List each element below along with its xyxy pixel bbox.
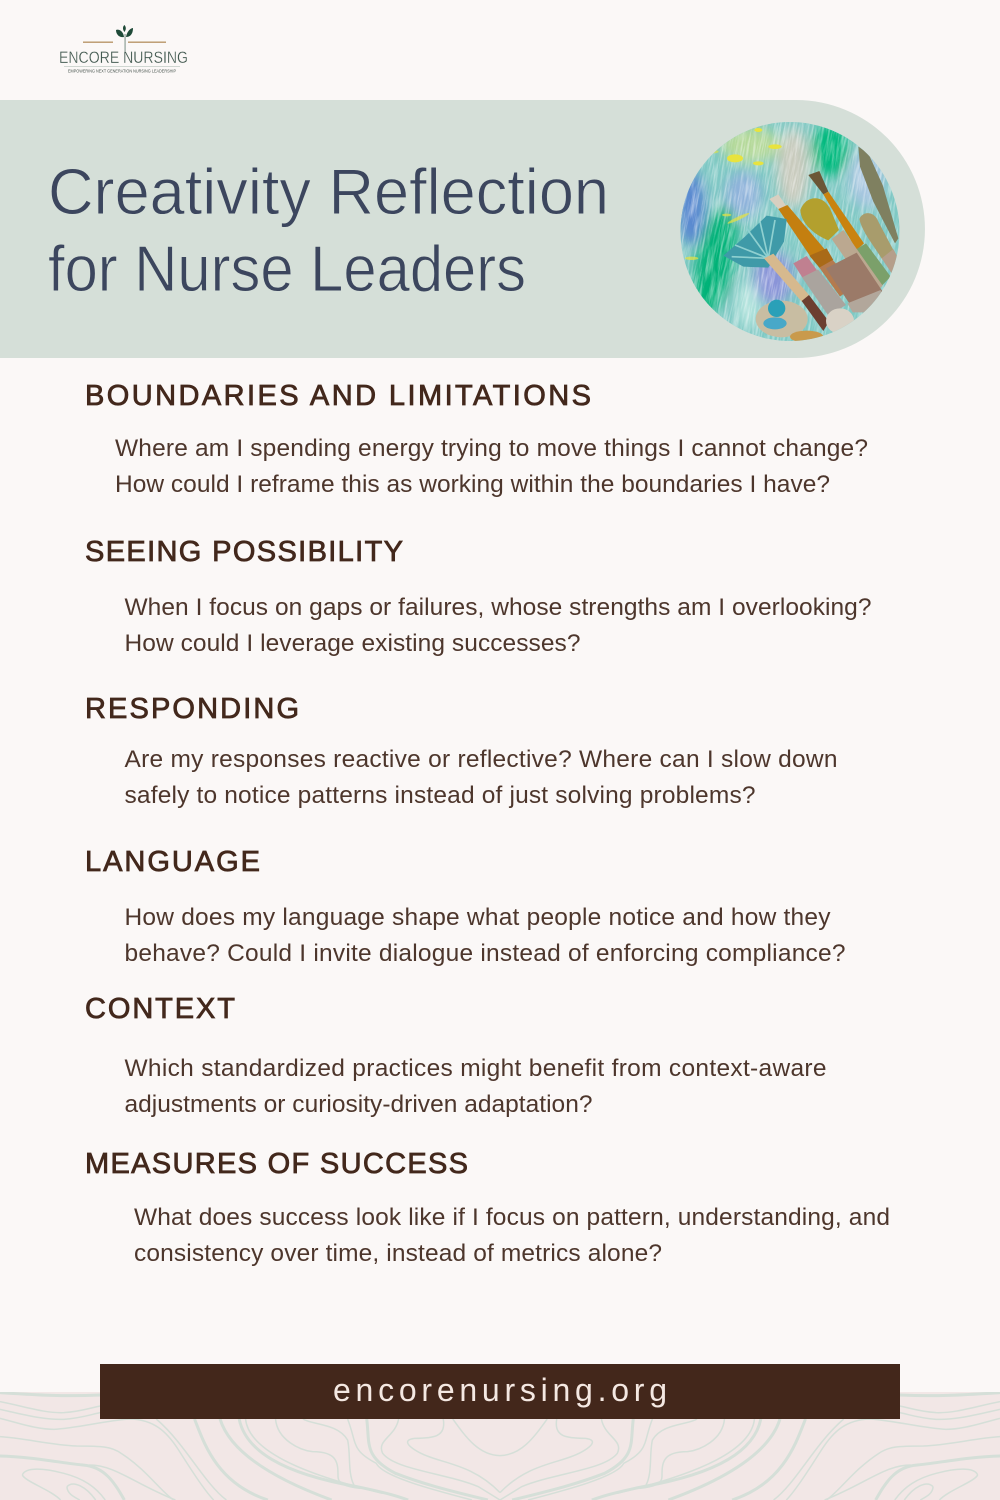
body text: consistency over time, instead of metrics alone? <box>134 1240 662 1267</box>
logo: Encore Nursing <box>59 25 188 74</box>
heading: RESPONDING <box>85 693 299 725</box>
paint jar and tube <box>756 300 854 343</box>
body text <box>124 904 846 967</box>
section: language <box>85 846 846 967</box>
body text <box>124 1055 826 1118</box>
footer bar <box>100 1364 900 1419</box>
footer url: encorenursing.org <box>333 1372 667 1408</box>
title <box>48 155 609 305</box>
heading: LANGUAGE <box>85 846 260 878</box>
heading: BOUNDARIES AND LIMITATIONS <box>85 380 591 412</box>
body text: How could I reframe this as working within the boundaries I have? <box>115 471 830 498</box>
icon: seedling <box>116 25 133 52</box>
flat brush <box>826 253 883 312</box>
body text: adjustments or curiosity-driven adaptation? <box>124 1091 592 1118</box>
body text: Where am I spending energy trying to move things I cannot change? <box>115 435 868 462</box>
body text: Which standardized practices might benefit from context-aware <box>124 1055 826 1082</box>
heading: MEASURES OF SUCCESS <box>85 1148 468 1180</box>
icon: gold rule lines <box>83 42 166 43</box>
body text: When I focus on gaps or failures, whose strengths am I overlooking? <box>124 594 872 621</box>
body text: How could I leverage existing successes? <box>124 630 580 657</box>
body text <box>134 1204 890 1267</box>
heading: CONTEXT <box>85 993 235 1025</box>
circular photo: paint brushes <box>680 122 900 341</box>
painted canvas <box>680 122 900 341</box>
yellow round brush <box>800 198 883 297</box>
bottom contour-pattern band <box>0 1392 1000 1500</box>
heading: SEEING POSSIBILITY <box>85 536 403 568</box>
title banner <box>0 100 925 358</box>
body text <box>115 435 868 498</box>
title: Creativity Reflection <box>48 155 609 228</box>
body text <box>124 746 838 809</box>
body text <box>124 594 872 657</box>
palette knife <box>858 147 898 243</box>
section: context <box>85 993 826 1118</box>
title: for Nurse Leaders <box>48 232 526 305</box>
body text: safely to notice patterns instead of just solving problems? <box>124 782 756 809</box>
logo tagline: EMPOWERING NEXT GENERATION NURSING LEADERSHIP <box>68 68 176 74</box>
pink small brush <box>793 256 846 316</box>
fan brush <box>723 216 829 331</box>
short pale brush <box>859 213 898 273</box>
section: measures of success <box>85 1148 890 1267</box>
body text: What does success look like if I focus on pattern, understanding, and <box>134 1204 890 1231</box>
body text: How does my language shape what people notice and how they <box>124 904 831 931</box>
section: responding <box>85 693 838 809</box>
section: seeing possibility <box>85 536 872 657</box>
top brush <box>808 171 891 288</box>
section: boundaries and limitations <box>85 380 868 498</box>
body text: Are my responses reactive or reflective? Where can I slow down <box>124 746 838 773</box>
gold long brush <box>770 194 844 296</box>
logo wordmark: ENCORE NURSING <box>59 48 188 67</box>
body text: behave? Could I invite dialogue instead of enforcing compliance? <box>124 940 846 967</box>
